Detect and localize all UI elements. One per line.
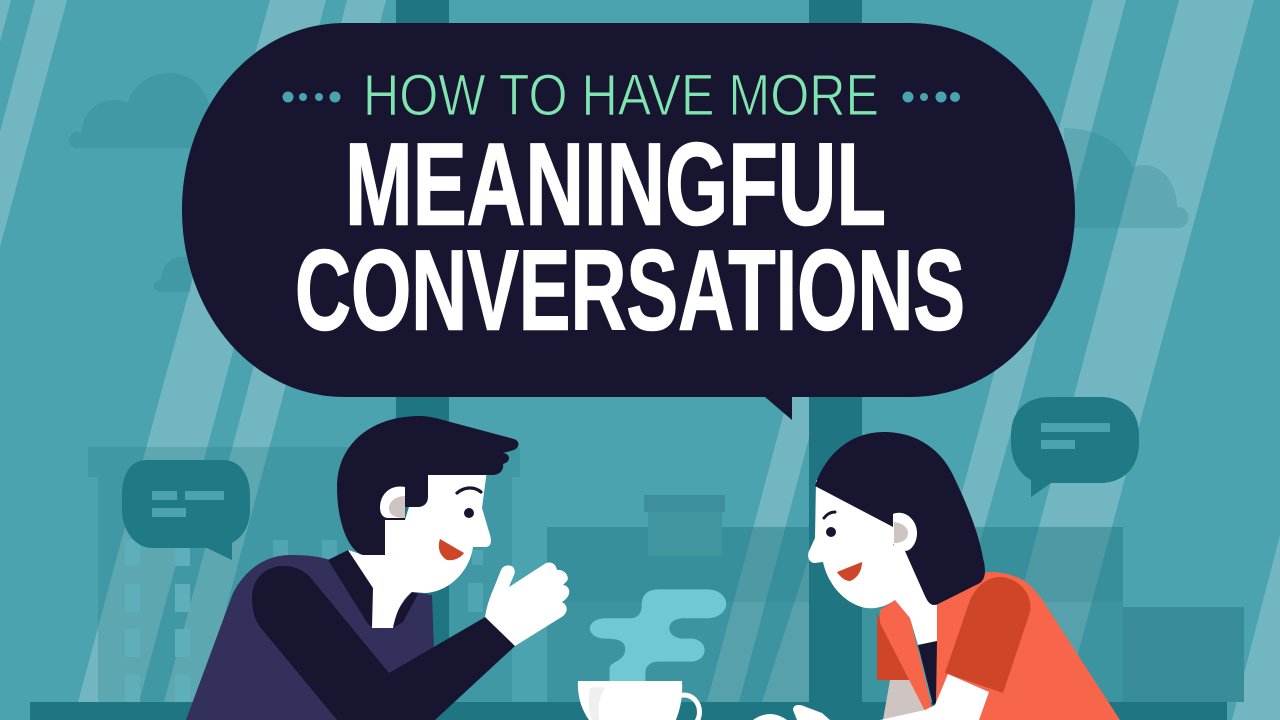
steam bbox=[590, 589, 726, 683]
woman: sleeve bbox=[945, 577, 1030, 693]
table bbox=[30, 702, 1227, 720]
man: face and neck bbox=[348, 470, 491, 628]
coffee cup bbox=[578, 681, 700, 720]
woman: jacket bbox=[936, 572, 1120, 720]
woman: forearm bbox=[880, 674, 989, 720]
woman: top bbox=[918, 641, 937, 705]
woman: ear bbox=[893, 513, 917, 551]
subtitle: HOW TO HAVE MORE bbox=[363, 63, 879, 128]
man: ear bbox=[380, 487, 405, 518]
man: collar bbox=[328, 550, 373, 627]
woman: face and neck bbox=[808, 480, 937, 645]
man: eye bbox=[464, 508, 474, 518]
dots left bbox=[282, 92, 340, 102]
bubble shape bbox=[182, 23, 1075, 420]
woman: mouth bbox=[837, 562, 862, 581]
woman: shirt bbox=[883, 680, 926, 720]
woman bbox=[753, 432, 1120, 720]
man: arm bbox=[252, 566, 515, 720]
title line 1: MEANINGFUL bbox=[345, 118, 886, 250]
man: hair bbox=[337, 416, 518, 555]
window pillars bbox=[396, 0, 862, 702]
dots right bbox=[902, 92, 960, 102]
title line 2: CONVERSATIONS bbox=[295, 228, 965, 354]
man: torso bbox=[186, 555, 434, 720]
chat bubble: right bbox=[1011, 397, 1139, 497]
woman: eyebrow bbox=[824, 512, 835, 518]
speech bubble bbox=[182, 23, 1075, 420]
man bbox=[186, 416, 569, 720]
woman: hair bbox=[815, 432, 985, 605]
man: hand bbox=[485, 563, 569, 646]
clouds bbox=[69, 73, 1188, 292]
woman: collar dark bbox=[877, 612, 910, 680]
cityscape buildings bbox=[88, 447, 1244, 702]
woman: hand bbox=[753, 705, 830, 720]
chat bubble: left bbox=[122, 460, 250, 560]
woman: eye bbox=[826, 527, 836, 537]
man: eyebrow bbox=[457, 488, 481, 493]
woman: collar bbox=[880, 600, 932, 711]
man: mouth bbox=[439, 539, 464, 560]
